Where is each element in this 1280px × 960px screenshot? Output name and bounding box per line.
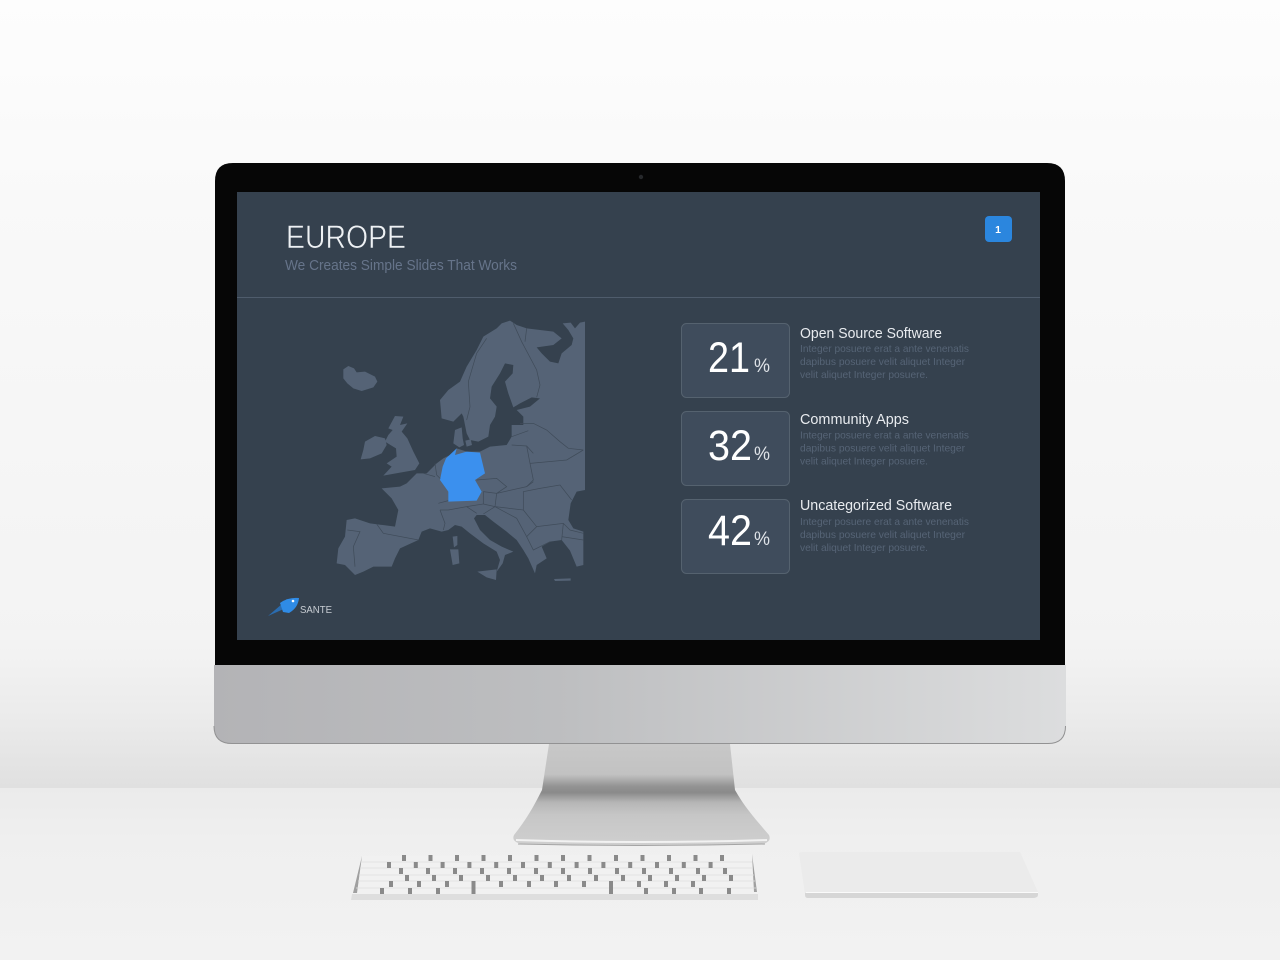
map of Europe [337,321,585,581]
Sardinia [450,549,459,565]
description [800,516,969,554]
monitor bezel [215,163,1065,666]
slide title: EUROPE [286,219,406,255]
Crete [554,578,571,581]
percentage box: 21 [708,334,750,382]
description: Integer posuere erat a ante venenatis [800,343,969,355]
Denmark [453,427,464,447]
Danish islands [465,439,472,447]
percentage box: 42 [708,507,752,555]
mainland Europe [337,321,585,575]
percentage box [682,500,790,574]
webcam [639,175,643,179]
description: dapibus posuere velit aliquet Integer [800,442,965,454]
description: velit aliquet Integer posuere. [800,542,928,554]
Great Britain [383,416,419,476]
percentage box: % [754,356,770,377]
description: Integer posuere erat a ante venenatis [800,430,969,442]
key gaps [382,855,736,894]
monitor stand [513,744,770,846]
logo: rocket and SANTE [268,598,332,616]
description: dapibus posuere velit aliquet Integer [800,356,965,368]
percentage box: % [754,444,770,465]
heading: Community Apps [800,412,909,428]
Germany highlighted [440,448,485,502]
description: velit aliquet Integer posuere. [800,456,928,468]
percentage box: % [754,529,770,550]
description [800,343,969,381]
percentage box [682,412,790,486]
logo text: SANTE [300,604,332,616]
monitor chin [214,665,1066,744]
trackpad [799,852,1038,898]
percentage box [682,324,790,398]
statistic: Uncategorized Software [682,498,969,574]
keyboard [351,854,758,900]
heading: Uncategorized Software [800,498,952,514]
statistic: Community Apps [682,412,969,486]
page number badge [985,216,1012,242]
slide subtitle: We Creates Simple Slides That Works [285,258,517,274]
Corsica [453,536,457,547]
page number badge: 1 [995,224,1001,236]
country borders [347,323,583,567]
keyboard body [351,854,758,900]
description [800,430,969,468]
percentage box: 32 [708,422,752,470]
slide screen [237,192,1040,640]
description: velit aliquet Integer posuere. [800,369,928,381]
Ireland [361,436,387,459]
icon: rocket [268,598,299,616]
Sicily [477,569,497,580]
Iceland [343,366,377,391]
statistic: Open Source Software [682,324,969,398]
monitor [214,163,1066,744]
description: Integer posuere erat a ante venenatis [800,516,969,528]
heading: Open Source Software [800,326,942,342]
description: dapibus posuere velit aliquet Integer [800,529,965,541]
